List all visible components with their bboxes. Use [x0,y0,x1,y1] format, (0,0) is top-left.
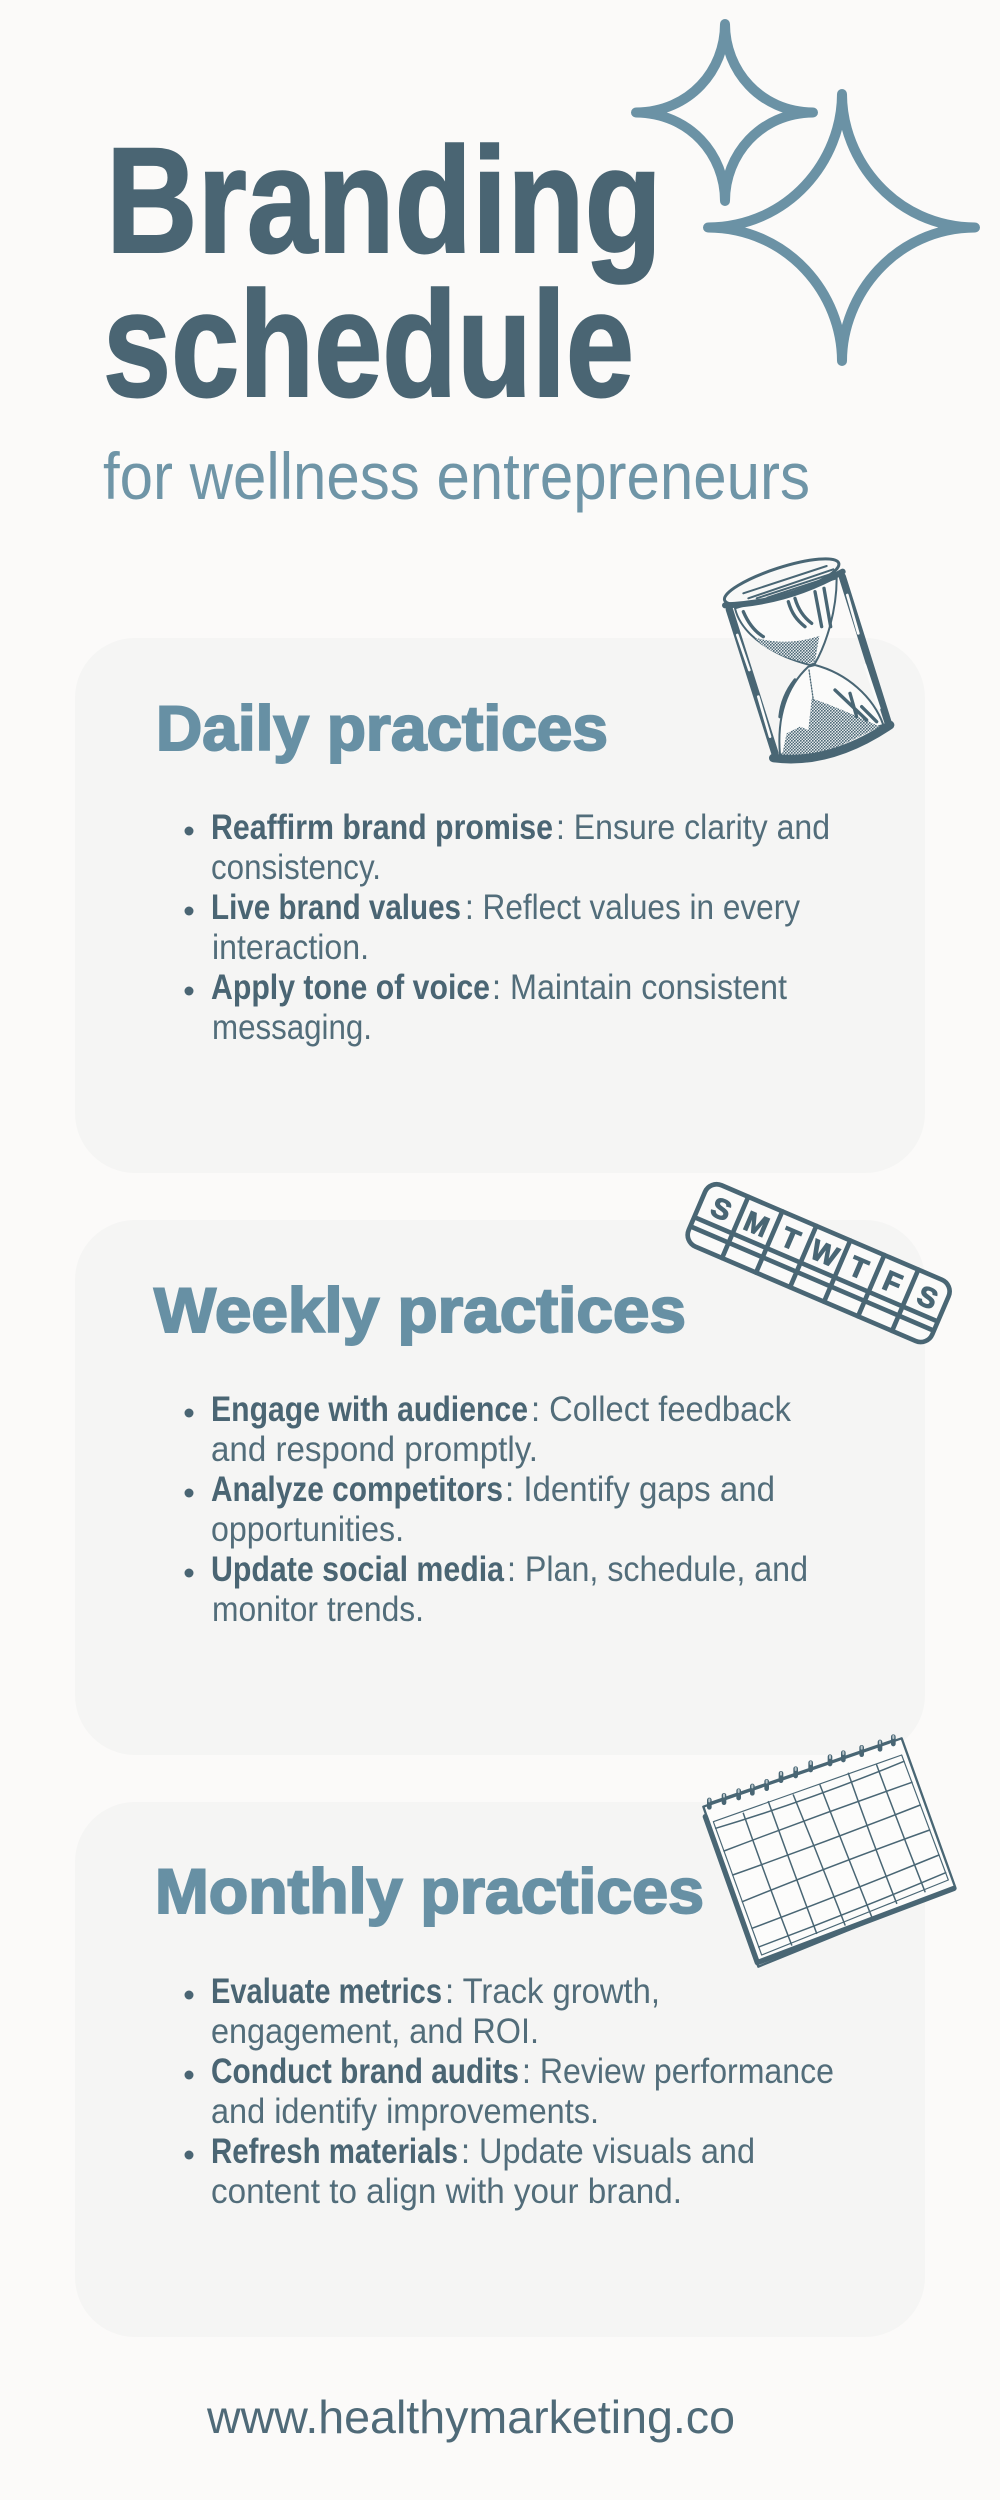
icon: week strip: M [739,1205,773,1244]
bullet list: weekly: Analyze competitors [211,1470,503,1509]
icon: hourglass [720,550,890,759]
bullet list: daily: : Reflect values in every [465,888,800,927]
bullet list: daily: Reaffirm brand promise [211,808,553,847]
icon: week strip [684,1180,954,1346]
icon: week strip: T [844,1250,873,1287]
bullet list: weekly: : Identify gaps and [505,1470,775,1509]
bullet list: daily: messaging. [212,1008,372,1047]
bullet list: monthly: : Review performance [522,2052,834,2091]
icon: week strip: T [776,1221,805,1258]
bullet list: daily: : Ensure clarity and [556,808,830,847]
title [103,116,662,428]
bullet list: weekly: : Plan, schedule, and [507,1550,808,1589]
panel: monthly practices [75,1802,925,2337]
icon: sparkle stars [636,24,975,361]
bullet list: monthly: : Track growth, [445,1972,660,2011]
bullet list: weekly: and respond promptly. [211,1430,538,1469]
bullet list: daily [184,808,830,1047]
subtitle: for wellness entrepreneurs [103,439,810,513]
bullet list: weekly: monitor trends. [212,1590,424,1629]
bullet list: monthly: and identify improvements. [211,2092,599,2131]
bullet list: monthly: content to align with your brand. [211,2172,682,2211]
bullet list: weekly: Engage with audience [211,1390,528,1429]
heading: daily practices: Daily practices [156,694,608,764]
icon: week strip: F [878,1265,907,1301]
bullet list: weekly: opportunities. [211,1510,404,1549]
title: schedule [103,260,634,428]
website footer: www.healthymarketing.co [206,2391,735,2443]
bullet list: weekly [184,1390,808,1629]
bullet list: daily: Live brand values [211,888,461,927]
bullet list: daily: consistency. [211,848,381,887]
icon: week strip: S [706,1191,736,1228]
bullet list: monthly: engagement, and ROI. [211,2012,539,2051]
heading: monthly practices: Monthly practices [155,1857,704,1927]
icon: week strip: W [805,1234,844,1274]
heading: weekly practices: Weekly practices [154,1276,686,1346]
bullet list: monthly: Conduct brand audits [211,2052,519,2091]
bullet list: monthly: : Update visuals and [461,2132,755,2171]
bullet list: monthly: Refresh materials [211,2132,458,2171]
bullet list: daily: interaction. [212,928,369,967]
bullet list: weekly: : Collect feedback [531,1390,791,1429]
panel: weekly practices [75,1220,925,1755]
icon: week strip: S [912,1280,942,1317]
bullet list: daily: : Maintain consistent [492,968,787,1007]
panel: daily practices [75,638,925,1173]
bullet list: monthly [184,1972,834,2211]
bullet list: monthly: Evaluate metrics [211,1972,442,2011]
icon: wall calendar [703,1736,955,1967]
bullet list: weekly: Update social media [211,1550,504,1589]
title: Branding [106,116,662,284]
bullet list: daily: Apply tone of voice [211,968,490,1007]
